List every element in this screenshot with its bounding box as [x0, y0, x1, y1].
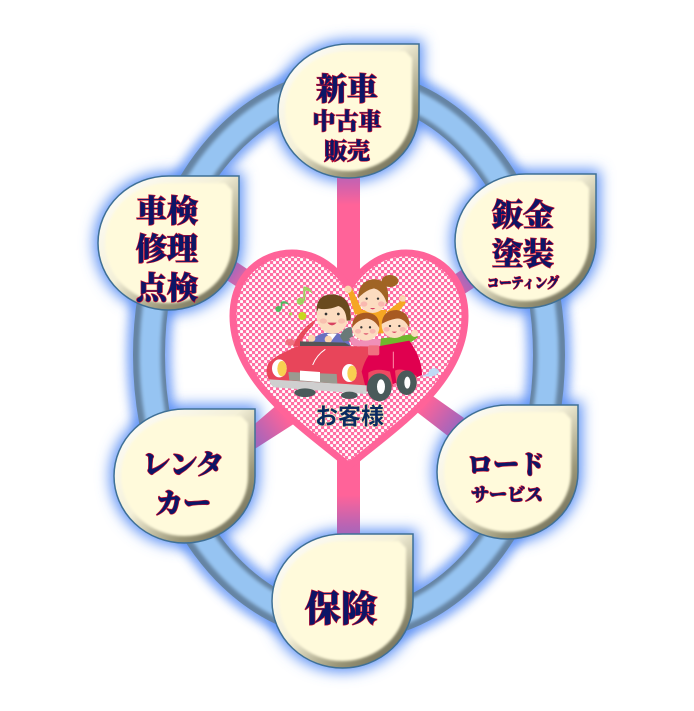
service: road service: サービス [471, 485, 543, 505]
service: inspection and repair: 点検 [136, 271, 198, 306]
service: new and used car sales: 販売 [324, 139, 370, 164]
glow: blue halo behind ring [149, 85, 549, 625]
service: inspection and repair: 車検 [136, 194, 198, 229]
spokes from the customer heart to each service [222, 170, 478, 540]
car body [267, 319, 439, 401]
service: road service [437, 405, 578, 539]
service: inspection and repair: 修理 [136, 232, 198, 267]
service: body repair and coating [455, 174, 596, 308]
heart: customer area [233, 253, 465, 466]
service: new and used car sales: 新車 [316, 72, 378, 107]
service: rental car [114, 409, 255, 543]
headrest [340, 327, 353, 342]
service: rental car: カー [155, 489, 211, 520]
service: insurance: 保険 [305, 589, 377, 629]
service: insurance [272, 534, 413, 668]
glow: blue halo behind service drops [98, 44, 596, 668]
service: inspection and repair [98, 176, 239, 310]
mother [344, 275, 406, 333]
service: new and used car sales [278, 44, 419, 178]
child girl [349, 313, 383, 347]
caption: customer: お客様 [315, 403, 384, 429]
service: body repair and coating: 塗装 [492, 237, 554, 272]
service: road service: ロード [467, 451, 545, 480]
ring connecting the services [149, 85, 549, 625]
service: new and used car sales: 中古車 [312, 109, 382, 134]
service: body repair and coating: コーティング [487, 275, 559, 292]
music notes [275, 287, 313, 320]
child boy [380, 310, 418, 347]
service: rental car: レンタ [142, 450, 224, 481]
service: body repair and coating: 鈑金 [492, 198, 554, 233]
illustration: family in red car [267, 275, 439, 401]
father [307, 294, 351, 347]
